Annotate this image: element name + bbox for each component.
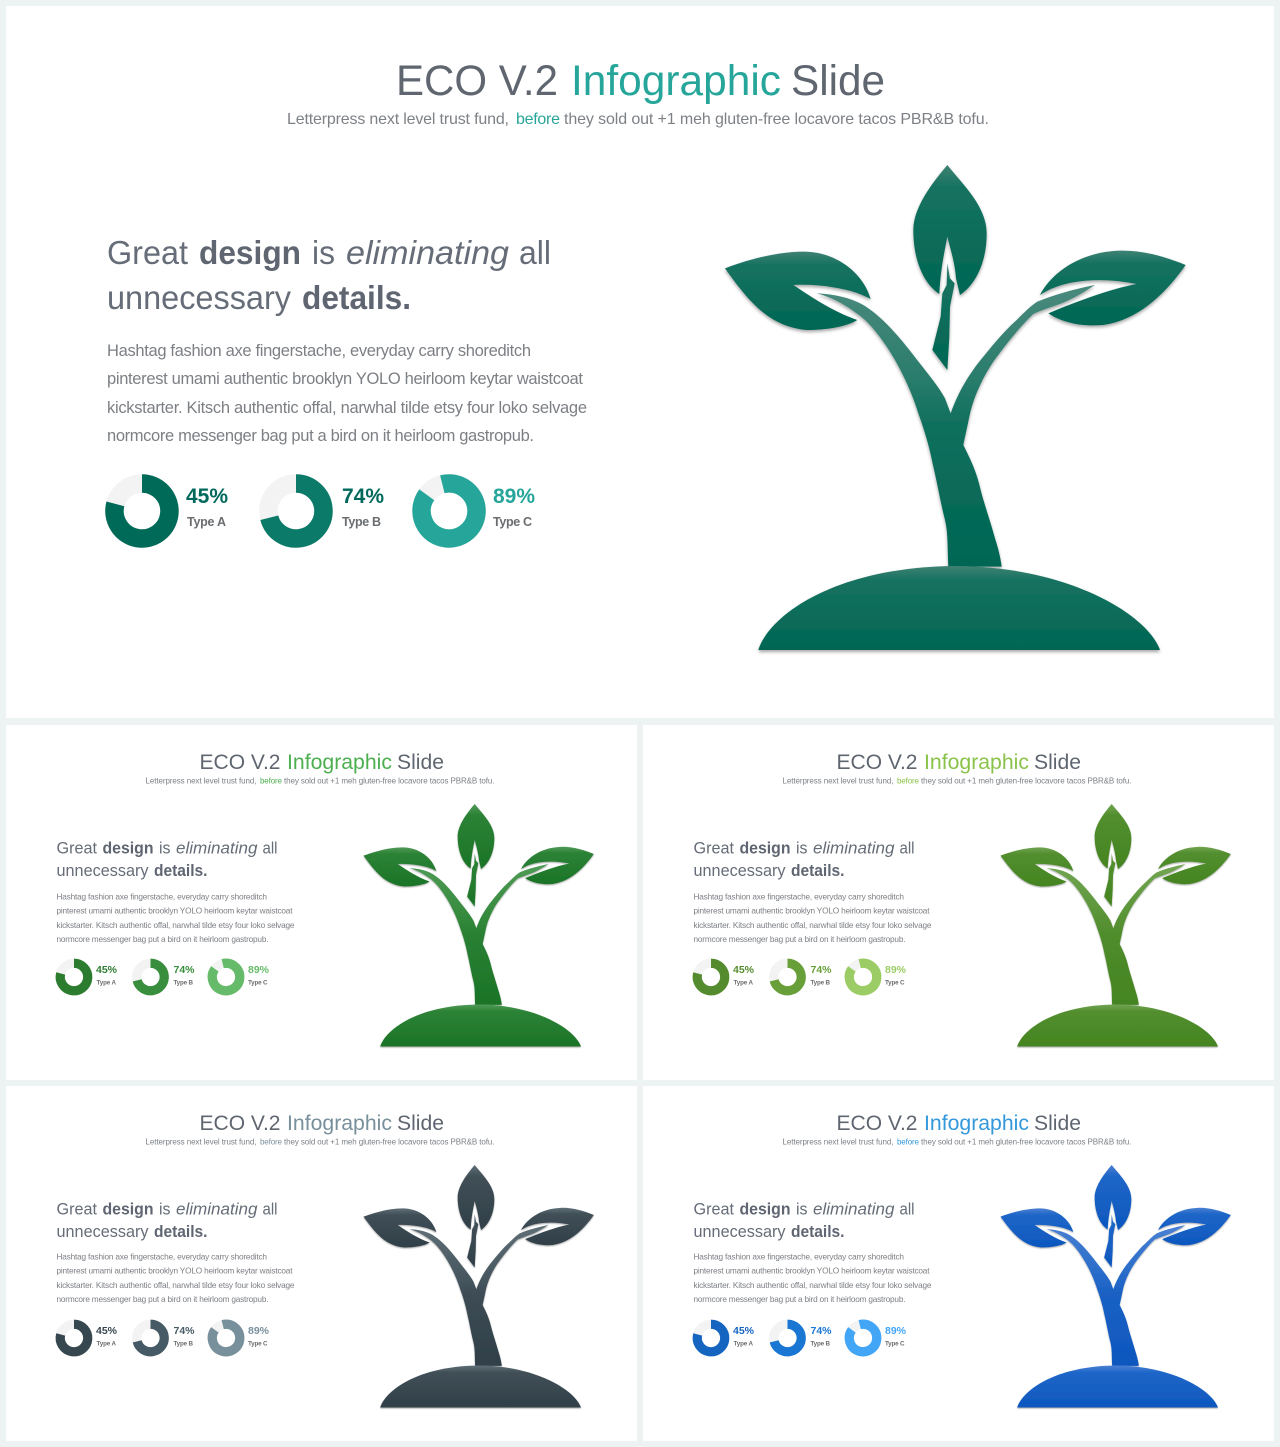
title: Slide xyxy=(397,1111,444,1135)
donut: Type C 89%: 89% xyxy=(885,964,907,976)
subtitle xyxy=(146,1138,494,1146)
subtitle xyxy=(782,776,1132,786)
paragraph xyxy=(56,1252,295,1304)
donut: Type C 89%: 89% xyxy=(248,1325,270,1337)
donut: Type B 74% xyxy=(774,963,832,991)
heading: eliminating xyxy=(176,840,258,858)
paragraph: pinterest umami authentic brooklyn YOLO heirloom keytar waistcoat xyxy=(694,1266,930,1276)
title: ECO V.2 xyxy=(200,1111,280,1135)
heading: unnecessary xyxy=(107,279,291,316)
donut: Type B 74%: 74% xyxy=(342,485,384,508)
panel: slate slide xyxy=(6,1086,637,1441)
heading: design xyxy=(199,234,301,271)
title xyxy=(200,750,444,774)
heading: is xyxy=(796,840,808,858)
heading xyxy=(56,840,278,880)
title xyxy=(836,1111,1081,1135)
paragraph: kickstarter. Kitsch authentic offal, narwhal tilde etsy four loko selvage xyxy=(694,921,932,930)
title xyxy=(200,1111,444,1135)
heading: is xyxy=(796,1200,808,1218)
panel: green slide xyxy=(6,725,637,1080)
paragraph: pinterest umami authentic brooklyn YOLO heirloom keytar waistcoat xyxy=(694,906,930,916)
heading: unnecessary xyxy=(56,1223,149,1241)
subtitle xyxy=(146,776,494,786)
donut: Type A 45% xyxy=(60,1324,118,1352)
heading: eliminating xyxy=(813,840,895,858)
heading: Great xyxy=(694,840,734,858)
donut: Type A 45%: 45% xyxy=(96,1325,118,1337)
heading: unnecessary xyxy=(694,862,786,880)
donut: Type B 74% xyxy=(774,1324,832,1352)
donut: Type A 45%: Type A xyxy=(96,1340,116,1348)
heading xyxy=(694,1200,914,1241)
title: Infographic xyxy=(924,750,1029,774)
heading: Great xyxy=(56,840,97,858)
heading: is xyxy=(159,1200,170,1218)
donut: Type C 89%: Type C xyxy=(493,515,532,529)
paragraph: pinterest umami authentic brooklyn YOLO heirloom keytar waistcoat xyxy=(56,1266,293,1276)
heading xyxy=(694,840,914,880)
donut: Type B 74%: Type B xyxy=(174,1340,193,1348)
paragraph xyxy=(56,892,295,944)
paragraph: normcore messenger bag put a bird on it heirloom gastropub. xyxy=(56,1295,268,1304)
donut: Type B 74%: Type B xyxy=(174,980,193,986)
donut: Type C 89% xyxy=(849,963,907,991)
panel: blue slide xyxy=(643,1086,1274,1441)
heading: all xyxy=(262,1200,278,1218)
heading xyxy=(56,1200,278,1241)
heading: details. xyxy=(791,862,844,880)
subtitle: they sold out +1 meh gluten-free locavore tacos PBR&B tofu. xyxy=(921,776,1132,786)
title: ECO V.2 xyxy=(836,750,918,774)
heading: all xyxy=(519,234,551,271)
heading: Great xyxy=(107,234,188,271)
paragraph: pinterest umami authentic brooklyn YOLO heirloom keytar waistcoat xyxy=(56,906,293,916)
subtitle: Letterpress next level trust fund, xyxy=(782,1138,894,1146)
donut: Type A 45%: 45% xyxy=(186,485,228,508)
paragraph: Hashtag fashion axe fingerstache, everyday carry shoreditch xyxy=(694,1252,904,1262)
paragraph: Hashtag fashion axe fingerstache, everyday carry shoreditch xyxy=(56,892,267,902)
plant illustration xyxy=(1000,1165,1231,1407)
heading: Great xyxy=(56,1200,97,1218)
heading: eliminating xyxy=(813,1200,895,1218)
title: ECO V.2 xyxy=(836,1111,918,1135)
donut: Type B 74%: 74% xyxy=(810,964,832,976)
heading: unnecessary xyxy=(56,862,149,880)
title: Infographic xyxy=(287,1111,392,1135)
donut: Type A 45% xyxy=(697,1324,755,1352)
heading: eliminating xyxy=(176,1200,258,1218)
heading: details. xyxy=(154,1223,208,1241)
heading: eliminating xyxy=(346,234,510,271)
donut: Type B 74%: 74% xyxy=(174,964,195,976)
paragraph: Hashtag fashion axe fingerstache, everyday carry shoreditch xyxy=(107,342,531,360)
donut: Type A 45% xyxy=(114,484,228,538)
donut: Type B 74%: 74% xyxy=(810,1325,832,1337)
donut: Type C 89% xyxy=(212,963,270,991)
donut: Type C 89%: Type C xyxy=(885,1340,905,1348)
title: ECO V.2 xyxy=(200,750,280,774)
paragraph: kickstarter. Kitsch authentic offal, narwhal tilde etsy four loko selvage xyxy=(56,1281,295,1290)
paragraph: kickstarter. Kitsch authentic offal, narwhal tilde etsy four loko selvage xyxy=(694,1281,932,1290)
paragraph: normcore messenger bag put a bird on it heirloom gastropub. xyxy=(56,935,268,944)
donut: Type B 74% xyxy=(268,484,384,538)
paragraph: kickstarter. Kitsch authentic offal, narwhal tilde etsy four loko selvage xyxy=(56,921,295,930)
paragraph xyxy=(694,1252,932,1304)
heading: details. xyxy=(791,1223,844,1241)
paragraph: normcore messenger bag put a bird on it heirloom gastropub. xyxy=(694,1295,906,1304)
heading xyxy=(107,234,551,316)
donut: Type A 45%: Type A xyxy=(734,1340,753,1348)
title: Slide xyxy=(397,750,444,774)
paragraph: Hashtag fashion axe fingerstache, everyday carry shoreditch xyxy=(56,1252,267,1262)
paragraph: normcore messenger bag put a bird on it heirloom gastropub. xyxy=(107,427,534,445)
title: Infographic xyxy=(924,1111,1029,1135)
paragraph: normcore messenger bag put a bird on it heirloom gastropub. xyxy=(694,935,906,944)
donut: Type A 45% xyxy=(697,963,755,991)
subtitle: they sold out +1 meh gluten-free locavore tacos PBR&B tofu. xyxy=(284,776,494,786)
title: Slide xyxy=(1034,1111,1081,1135)
heading: details. xyxy=(302,279,411,316)
panel: light green slide xyxy=(643,725,1274,1080)
panel: main teal slide xyxy=(6,6,1274,718)
paragraph: pinterest umami authentic brooklyn YOLO heirloom keytar waistcoat xyxy=(107,370,583,388)
donut: Type C 89%: Type C xyxy=(885,980,905,986)
donut: Type B 74%: Type B xyxy=(342,515,381,529)
donut: Type A 45%: Type A xyxy=(187,515,226,529)
subtitle: they sold out +1 meh gluten-free locavore tacos PBR&B tofu. xyxy=(564,111,989,128)
subtitle: they sold out +1 meh gluten-free locavore tacos PBR&B tofu. xyxy=(284,1138,494,1146)
heading: Great xyxy=(694,1200,734,1218)
subtitle: Letterpress next level trust fund, xyxy=(287,111,509,128)
donut: Type C 89%: 89% xyxy=(885,1325,907,1337)
title xyxy=(836,750,1081,774)
donut: Type C 89%: 89% xyxy=(493,485,535,508)
donut: Type A 45%: Type A xyxy=(734,980,753,986)
donut: Type C 89% xyxy=(849,1324,907,1352)
paragraph xyxy=(107,342,587,445)
heading: design xyxy=(740,840,790,858)
donut: Type C 89% xyxy=(212,1324,270,1352)
donut: Type A 45% xyxy=(60,963,118,991)
plant illustration xyxy=(725,165,1186,650)
subtitle: Letterpress next level trust fund, xyxy=(146,1138,256,1146)
paragraph xyxy=(694,892,932,944)
donut: Type A 45%: 45% xyxy=(733,1325,755,1337)
donut: Type C 89%: Type C xyxy=(248,980,268,986)
heading: all xyxy=(900,1200,914,1218)
donut: Type C 89%: 89% xyxy=(248,964,270,976)
heading: all xyxy=(262,840,278,858)
donut: Type B 74% xyxy=(137,963,195,991)
subtitle: before xyxy=(260,776,283,786)
heading: all xyxy=(900,840,914,858)
subtitle xyxy=(287,111,989,128)
heading: design xyxy=(102,1200,154,1218)
heading: is xyxy=(159,840,170,858)
donut: Type C 89%: Type C xyxy=(248,1340,268,1348)
subtitle: before xyxy=(516,111,560,128)
donut: Type B 74% xyxy=(137,1324,195,1352)
subtitle xyxy=(782,1138,1132,1146)
title: Slide xyxy=(1034,750,1081,774)
subtitle: Letterpress next level trust fund, xyxy=(782,776,894,786)
title: Infographic xyxy=(287,750,392,774)
paragraph: kickstarter. Kitsch authentic offal, narwhal tilde etsy four loko selvage xyxy=(107,399,587,417)
subtitle: before xyxy=(897,1138,920,1146)
donut: Type A 45%: 45% xyxy=(96,964,118,976)
donut: Type B 74%: Type B xyxy=(810,1340,830,1348)
title: Slide xyxy=(791,57,885,105)
heading: unnecessary xyxy=(694,1223,786,1241)
subtitle: before xyxy=(260,1138,283,1146)
subtitle: Letterpress next level trust fund, xyxy=(146,776,256,786)
donut: Type C 89% xyxy=(422,483,535,538)
title: Infographic xyxy=(571,57,781,105)
plant illustration xyxy=(363,1165,594,1407)
plant illustration xyxy=(1000,804,1231,1046)
subtitle: before xyxy=(897,776,920,786)
donut: Type A 45%: Type A xyxy=(96,980,116,986)
donut: Type B 74%: Type B xyxy=(810,980,830,986)
donut: Type B 74%: 74% xyxy=(174,1325,195,1337)
donut: Type A 45%: 45% xyxy=(733,964,755,976)
subtitle: they sold out +1 meh gluten-free locavore tacos PBR&B tofu. xyxy=(921,1138,1132,1146)
paragraph: Hashtag fashion axe fingerstache, everyday carry shoreditch xyxy=(694,892,904,902)
plant illustration xyxy=(363,804,594,1046)
heading: design xyxy=(740,1200,790,1218)
heading: is xyxy=(312,234,335,271)
title: ECO V.2 xyxy=(396,57,558,105)
heading: details. xyxy=(154,862,208,880)
heading: design xyxy=(102,840,154,858)
title xyxy=(396,57,885,105)
